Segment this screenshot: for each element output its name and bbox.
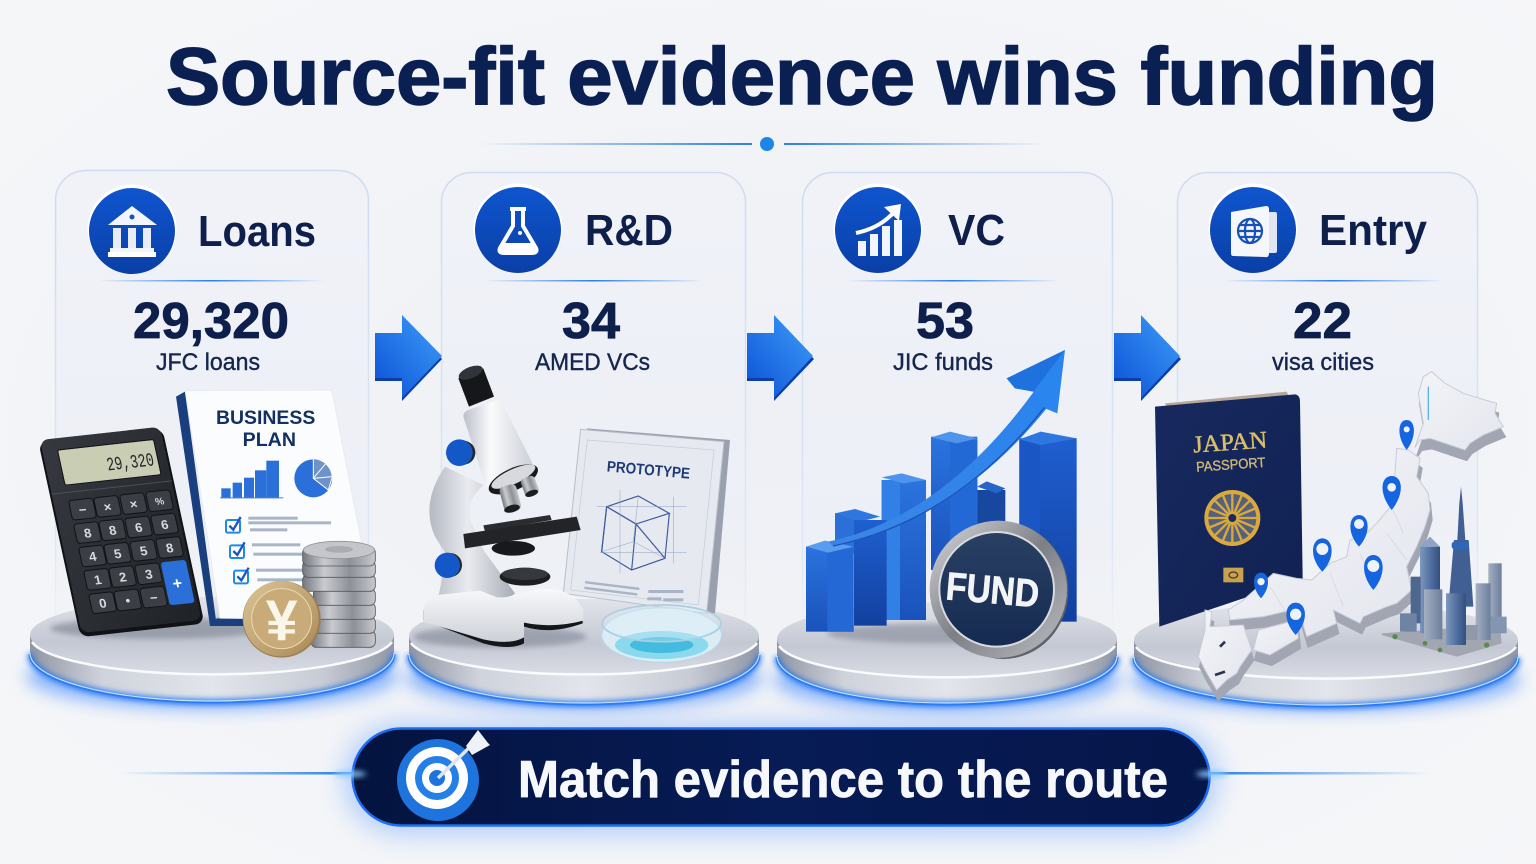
calculator: + bbox=[171, 574, 184, 593]
icon: growth chart bbox=[834, 184, 922, 273]
business plan document bbox=[176, 390, 377, 626]
rising arrow bbox=[828, 350, 1065, 547]
title: Source-fit evidence wins funding bbox=[166, 32, 1438, 122]
prototype document: PROTOTYPE bbox=[606, 458, 691, 483]
callout text: Match evidence to the route bbox=[518, 751, 1168, 809]
icon: bank bbox=[88, 184, 176, 274]
icon: passport globe bbox=[1208, 184, 1298, 273]
calculator: 3 bbox=[144, 567, 154, 582]
panel: R&D bbox=[406, 172, 762, 710]
podium: VC bbox=[774, 602, 1120, 712]
label: AMED VCs: AMED VCs bbox=[535, 349, 650, 376]
calculator: 8 bbox=[165, 540, 175, 556]
panel: entry bbox=[1131, 172, 1521, 712]
podium: entry bbox=[1131, 603, 1521, 712]
calculator: 1 bbox=[93, 572, 103, 588]
calculator: 4 bbox=[88, 549, 99, 564]
illustration: business plan, calculator and coins bbox=[38, 390, 377, 658]
stat: 34: 34 bbox=[562, 292, 621, 349]
heading: loans: Loans bbox=[198, 207, 316, 256]
skyline bbox=[1382, 487, 1507, 657]
heading: R&D: R&D bbox=[585, 206, 673, 255]
prototype document bbox=[563, 428, 730, 613]
title divider bbox=[480, 137, 1046, 151]
heading: VC: VC bbox=[948, 206, 1005, 255]
silver coin stack bbox=[303, 541, 375, 647]
calculator: 29,320 bbox=[105, 450, 156, 476]
calculator: × bbox=[102, 499, 113, 515]
gold yen coin bbox=[243, 581, 321, 658]
japan passport bbox=[1155, 392, 1303, 627]
arrow: R&D to VC bbox=[747, 315, 814, 401]
fund coin: FUND bbox=[944, 564, 1041, 616]
panel: loans bbox=[26, 170, 398, 710]
calculator: − bbox=[148, 590, 160, 605]
arrow: loans to R&D bbox=[375, 315, 442, 401]
gold yen coin: ¥ bbox=[266, 589, 298, 653]
calculator: 6 bbox=[159, 517, 170, 532]
label: JFC loans: JFC loans bbox=[156, 349, 260, 376]
heading: entry: Entry bbox=[1319, 206, 1427, 255]
calculator: % bbox=[154, 496, 166, 508]
japan map bbox=[1198, 372, 1505, 700]
podium: R&D bbox=[406, 599, 762, 710]
map pins bbox=[1254, 420, 1414, 635]
illustration: microscope, prototype and dish bbox=[413, 363, 730, 662]
calculator bbox=[38, 427, 204, 637]
calculator: 8 bbox=[107, 523, 118, 538]
calculator: 2 bbox=[118, 569, 128, 585]
stat: 53: 53 bbox=[916, 292, 974, 349]
arrow: VC to entry bbox=[1114, 315, 1181, 401]
calculator: − bbox=[77, 502, 88, 517]
business plan document: BUSINESS bbox=[216, 408, 315, 429]
calculator: 5 bbox=[113, 546, 123, 561]
calculator: × bbox=[128, 496, 139, 512]
business plan document: PLAN bbox=[243, 430, 296, 451]
calculator: 0 bbox=[98, 596, 108, 611]
icon: target with dart bbox=[397, 730, 490, 821]
label: visa cities: visa cities bbox=[1272, 349, 1374, 376]
3D bar chart bbox=[806, 432, 1077, 632]
calculator: • bbox=[124, 593, 132, 608]
callout banner bbox=[120, 726, 1430, 832]
japan passport: PASSPORT bbox=[1196, 454, 1266, 475]
fund coin bbox=[930, 521, 1068, 659]
calculator: 6 bbox=[133, 520, 144, 535]
podium: loans bbox=[26, 597, 398, 710]
label: JIC funds: JIC funds bbox=[893, 349, 993, 376]
stat: 29,320: 29,320 bbox=[133, 292, 289, 349]
petri dish bbox=[602, 605, 722, 662]
illustration: passport, map and skyline bbox=[1155, 372, 1507, 700]
calculator: 5 bbox=[139, 543, 149, 559]
microscope bbox=[413, 363, 587, 647]
panel: VC bbox=[774, 172, 1120, 712]
icon: flask bbox=[474, 184, 562, 273]
calculator: 8 bbox=[82, 525, 93, 541]
japan passport: JAPAN bbox=[1192, 427, 1268, 459]
illustration: bars, arrow and fund coin bbox=[806, 350, 1077, 659]
stat: 22: 22 bbox=[1293, 292, 1352, 349]
